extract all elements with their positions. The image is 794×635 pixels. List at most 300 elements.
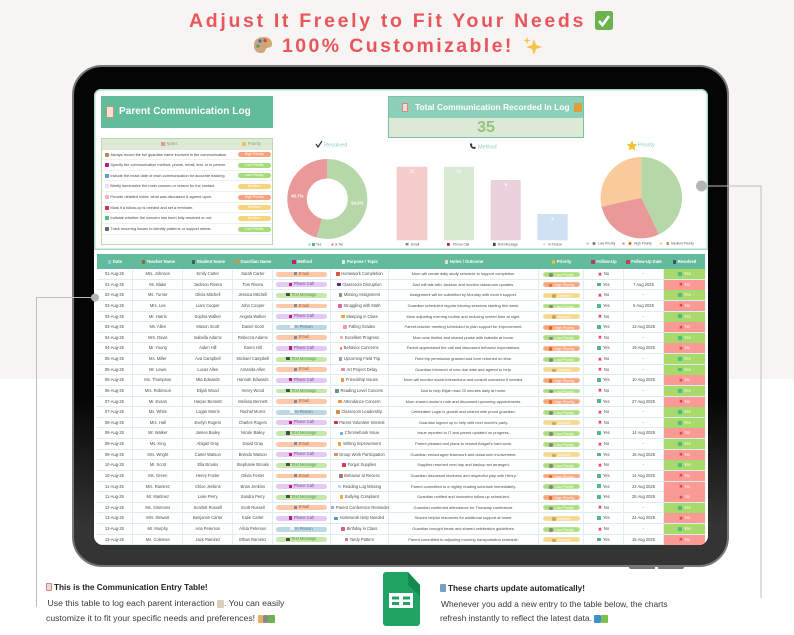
- row 24: Mrs. Stewart: [146, 515, 169, 520]
- row 23: ✖: [598, 505, 602, 511]
- row 12: ✖: [598, 388, 602, 394]
- row 10: 05-Aug-25: [105, 367, 124, 372]
- row 8: 04-Aug-25: [105, 345, 124, 350]
- donut legend: ×: [335, 242, 338, 247]
- row 25: 13-Aug-25: [105, 526, 124, 531]
- note 6: Mark if a follow-up is needed and set a reminder.: [110, 206, 193, 210]
- callout line: table: [36, 294, 99, 607]
- row 20: ✖: [679, 473, 683, 479]
- row 19: ✖: [598, 463, 602, 469]
- row 25: Yes: [684, 526, 691, 531]
- row 20: High Priority: [554, 475, 574, 479]
- row 4: Mrs. Lee: [150, 303, 166, 308]
- note 7: Indicate whether the concern has been fully resolved or not.: [110, 216, 212, 220]
- row 20: Behavior at Recess: [344, 473, 380, 478]
- row 13: Yes: [603, 398, 610, 404]
- row 1: Sarah Carter: [241, 271, 265, 276]
- row 5: Phone Call: [294, 313, 314, 318]
- row 23: Email: [299, 504, 309, 509]
- row 9: ✖: [598, 357, 602, 363]
- row 3: -: [643, 292, 644, 297]
- row 15: Parent Volunteer Interest: [339, 420, 385, 425]
- row 13: ✖: [679, 399, 683, 405]
- table header: Resolved: [678, 259, 696, 264]
- row 4: 6 Aug 2025: [633, 303, 654, 308]
- row 4: Email: [299, 303, 309, 308]
- row 17: Parent pleased and plans to reward Abigail's hard work.: [415, 441, 512, 446]
- row 9: Ava Campbell: [195, 356, 220, 361]
- row 11: High Priority: [554, 379, 574, 383]
- row 1: Mrs. Johnson: [146, 271, 170, 276]
- row 26: Yes: [603, 537, 610, 542]
- row 19: Mr. Scott: [150, 462, 166, 467]
- row 25: Aria Peterson: [195, 526, 220, 531]
- row 19: Forgot Supplies: [348, 462, 376, 467]
- charts note heading: These charts update automatically!: [448, 584, 585, 593]
- pie legend: High Priority: [634, 242, 652, 246]
- row 12: Yes: [684, 388, 691, 393]
- note 2: Low Priority: [245, 163, 263, 167]
- row 5: Mom adjusting evening routine and reducing screen time at night.: [406, 314, 520, 318]
- row 9: No: [604, 356, 609, 361]
- notes table header: Priority: [248, 141, 261, 146]
- note 8: Low Priority: [245, 227, 263, 231]
- row 13: Attendance Concern: [343, 398, 381, 404]
- note 2: Specify the communication method: phone, email, text, or in person.: [110, 163, 226, 167]
- note 5: Provide detailed notes: what was discussed & agreed upon.: [110, 195, 212, 199]
- row 18: Phone Call: [294, 451, 314, 456]
- total value: 35: [477, 118, 495, 136]
- note 1: [102, 150, 272, 160]
- row 17: ✖: [598, 442, 602, 448]
- row 17: Writing Improvement: [343, 441, 381, 446]
- row 16: No: [685, 430, 690, 435]
- row 14: -: [643, 409, 644, 414]
- row 3: 02-Aug-25: [105, 292, 124, 297]
- row 10: Guardian informed of new due date and agreed to help.: [415, 367, 512, 372]
- row 13: Melissa Bennett: [238, 398, 267, 404]
- row 23: Guardian confirmed attendance for Thursday conference.: [414, 505, 513, 510]
- row 8: Phone Call: [294, 345, 314, 350]
- row 4: Liam Cooper: [196, 303, 220, 308]
- row 7: [96, 333, 705, 343]
- upper background band: [0, 0, 794, 379]
- row 18: 09-Aug-25: [105, 452, 124, 457]
- text block: charts note: [440, 584, 668, 623]
- row 26: ✖: [679, 537, 683, 543]
- row 2: ✖: [679, 282, 683, 288]
- row 14: Logan Morris: [196, 409, 220, 414]
- row 21: Reading Log Missing: [343, 484, 381, 488]
- row 19: Yes: [684, 462, 691, 467]
- row 8: No: [685, 345, 690, 350]
- row 1: Yes: [684, 271, 691, 276]
- donut legend: [308, 242, 343, 247]
- row 19: 10-Aug-25: [105, 462, 124, 467]
- row 8: Aiden Hill: [199, 345, 216, 350]
- row 22: No: [685, 494, 690, 499]
- method title: Method: [478, 145, 497, 151]
- row 8: Parent appreciated the call and discussed behavior expectations.: [407, 345, 520, 350]
- heading line 2: 100% Customizable!: [282, 35, 514, 57]
- row 23: Low Priority: [555, 506, 574, 510]
- row 15: ✖: [598, 420, 602, 426]
- row 13: 07-Aug-25: [105, 398, 124, 404]
- row 11: Yes: [603, 377, 610, 382]
- row 3: Ms. Turner: [148, 292, 168, 297]
- row 8: Yes: [603, 345, 610, 350]
- row 5: -: [643, 314, 644, 318]
- row 23: Yes: [684, 505, 691, 510]
- bar values: [410, 168, 554, 221]
- heading line 1: Adjust It Freely to Fit Your Needs: [189, 10, 586, 32]
- row 2: No: [685, 282, 690, 287]
- pie chart: priority: [586, 140, 694, 246]
- row 21: Low Priority: [555, 485, 574, 489]
- row 5: Angela Walker: [240, 314, 266, 318]
- row 20: [96, 471, 705, 482]
- tablet frame: [72, 65, 729, 567]
- row 20: 10-Aug-25: [105, 473, 124, 478]
- row 1: No: [604, 271, 609, 276]
- row 23: Parent Conference Reminder: [336, 505, 389, 510]
- row 6: Ms. Allen: [149, 324, 166, 329]
- row 25: In Person: [295, 526, 313, 531]
- row 19: No: [604, 462, 609, 467]
- row 6: [96, 322, 705, 333]
- row 19: Text Message: [291, 462, 317, 467]
- row 16: Nicole Bailey: [241, 430, 265, 435]
- row 20: 14 Aug 2025: [632, 473, 655, 478]
- row 16: 08-Aug-25: [105, 430, 124, 435]
- row 10: Email: [299, 366, 309, 371]
- row 10: Art Project Delay: [347, 367, 377, 372]
- row 2: Jackson Rivera: [194, 282, 222, 287]
- row 20: Yes: [603, 473, 610, 478]
- table header: Student Name: [197, 259, 225, 264]
- row 11: [96, 375, 705, 386]
- row 7: Low Priority: [555, 336, 574, 340]
- row 26: 13-Aug-25: [105, 537, 124, 542]
- row 2: Classroom Disruption: [342, 282, 382, 287]
- row 24: Homework Help Needed: [340, 515, 384, 520]
- row 3: Olivia Mitchell: [195, 292, 220, 297]
- row 26: Medium: [558, 538, 571, 542]
- row 6: Mason Scott: [196, 324, 219, 329]
- row 4: No: [685, 303, 690, 308]
- row 14: Classroom Leadership: [341, 409, 382, 414]
- row 9: Upcoming Field Trip: [344, 356, 380, 361]
- row 3: [96, 290, 705, 301]
- bar values: 11: [410, 168, 415, 174]
- dashboard panel: [94, 89, 708, 250]
- row 14: Celebrated Logan's growth and shared with proud guardian.: [411, 409, 516, 414]
- row 11: Mom will monitor social interactions and consult counselor if needed.: [404, 377, 523, 382]
- row 5: ✖: [598, 314, 602, 320]
- note 5: [102, 192, 272, 203]
- row 26: Jack Ramirez: [195, 537, 220, 542]
- row 10: ✖: [598, 367, 602, 373]
- bar chart: method: [396, 143, 568, 247]
- row 16: Chromebook Issue: [345, 430, 379, 435]
- pie legend: Low Priority: [598, 242, 616, 246]
- row 24: ✖: [679, 516, 683, 522]
- row 25: Alicia Peterson: [239, 526, 266, 531]
- row 15: Guardian signed up to help with next month's party.: [419, 420, 508, 425]
- row 25: No: [604, 526, 609, 531]
- row 21: [96, 482, 705, 492]
- text block: entry table note: [46, 583, 284, 623]
- row 18: ✖: [679, 452, 683, 458]
- entry table line 1: Use this table to log each parent interaction . You can easily: [48, 598, 284, 608]
- row 2: 01-Aug-25: [105, 282, 124, 287]
- row 13: Mom shared doctor's note and discussed upcoming appointments.: [406, 398, 521, 404]
- row 2: [96, 280, 705, 290]
- row 10: [96, 365, 705, 375]
- notes and priority table: [101, 138, 273, 245]
- row 12: No: [604, 388, 609, 393]
- row 1: Emily Carter: [197, 271, 219, 276]
- row 1: [96, 269, 705, 280]
- row 19: Stephanie Brooks: [237, 462, 269, 467]
- row 5: Medium: [558, 315, 571, 319]
- row 5: No: [604, 314, 609, 318]
- callout line: charts: [696, 180, 762, 598]
- row 17: -: [643, 441, 644, 446]
- row 6: 03-Aug-25: [105, 324, 124, 329]
- tablet screen: [94, 89, 708, 545]
- row 3: Medium: [558, 294, 571, 298]
- row 1: -: [643, 271, 644, 276]
- row 18: Brenda Watson: [239, 452, 267, 457]
- row 16: ✖: [679, 431, 683, 437]
- row 18: Medium: [558, 453, 571, 457]
- row 5: Yes: [684, 314, 691, 318]
- note 6: [102, 203, 272, 213]
- row 6: Yes: [603, 324, 610, 329]
- row 11: Mia Edwards: [196, 377, 220, 382]
- row 3: Text Message: [291, 292, 317, 297]
- table header: Method: [297, 259, 312, 264]
- row 16: Yes: [603, 430, 610, 435]
- row 16: Mr. Walker: [148, 430, 168, 435]
- row 13: Email: [299, 398, 309, 403]
- row 17: David Gray: [243, 441, 263, 446]
- row 14: Ms. White: [149, 409, 167, 414]
- note 2: [102, 160, 272, 171]
- row 22: Text Message: [291, 494, 317, 499]
- row 8: 19 Aug 2025: [632, 345, 655, 350]
- dashboard title: Parent Communication Log: [119, 106, 251, 117]
- row 1: Low Priority: [555, 273, 574, 277]
- row 20: Guardian discussed kindness and respectful play with Henry.: [410, 473, 517, 478]
- row 22: Sandra Perry: [241, 494, 265, 499]
- row 6: ✖: [679, 325, 683, 331]
- row 16: 14 Aug 2025: [632, 430, 655, 435]
- table header: Date: [113, 259, 122, 264]
- row 18: No: [685, 452, 690, 457]
- dashboard title: [101, 96, 273, 128]
- row 10: Lucas Allen: [197, 367, 218, 372]
- row 7: Isabella Adams: [194, 335, 222, 340]
- row 14: 07-Aug-25: [105, 409, 124, 414]
- bar labels: In Person: [548, 243, 562, 247]
- row 7: 04-Aug-25: [105, 335, 124, 340]
- row 23: No: [604, 505, 609, 510]
- row 22: 25 Aug 2025: [632, 494, 655, 499]
- method title: [470, 143, 497, 151]
- row 2: Yes: [603, 282, 610, 287]
- row 7: Rebecca Adams: [238, 335, 268, 340]
- row 15: [96, 418, 705, 428]
- row 25: [96, 524, 705, 535]
- row 19: Supplies returned next day and backup set arranged.: [417, 462, 510, 467]
- row 4: Low Priority: [555, 305, 574, 309]
- donut slices: 45.7%: [291, 193, 304, 198]
- row 12: 06-Aug-25: [105, 388, 124, 393]
- row 21: Phone Call: [294, 483, 314, 488]
- pie legend: [586, 242, 694, 246]
- row 22: High Priority: [554, 496, 574, 500]
- row 21: Parent committed to a nightly reading schedule immediately.: [411, 484, 516, 488]
- row 8: High Priority: [554, 347, 574, 351]
- pie legend: Medium Priority: [671, 242, 694, 246]
- row 4: Guardian scheduled regular tutoring sessions starting this week.: [408, 303, 519, 308]
- row 6: Falling Grades: [349, 324, 375, 329]
- note 4: Briefly summarize the main concern or reason for the contact.: [110, 184, 215, 188]
- row 1: 01-Aug-25: [105, 271, 124, 276]
- row 22: Yes: [603, 494, 610, 499]
- row 7: -: [643, 335, 644, 340]
- row 25: Birthday in Class: [347, 526, 377, 531]
- row 19: Ella Brooks: [197, 462, 218, 467]
- row 4: John Cooper: [241, 303, 265, 308]
- row 8: Karen Hill: [244, 345, 262, 350]
- row 18: Group Work Participation: [339, 452, 385, 457]
- pie slices: [601, 157, 682, 238]
- row 9: -: [643, 356, 644, 361]
- row 16: Issue reported to IT and parent updated on progress.: [417, 430, 510, 435]
- row 13: No: [685, 398, 690, 404]
- entry table heading: This is the Communication Entry Table!: [54, 583, 208, 592]
- row 4: Struggling with Math: [343, 303, 380, 308]
- row 19: Low Priority: [555, 464, 574, 468]
- row 13: High Priority: [554, 400, 574, 404]
- note 3: [102, 171, 272, 181]
- note 7: [102, 213, 272, 224]
- row 15: 08-Aug-25: [105, 420, 124, 425]
- row 15: Mrs. Hall: [150, 420, 166, 425]
- donut legend: Yes: [316, 243, 322, 247]
- note 4: Medium: [248, 184, 260, 188]
- row 3: Assignment will be submitted by Monday with mom's support.: [410, 292, 517, 297]
- row 13: [96, 396, 705, 407]
- row 17: Low Priority: [555, 443, 574, 447]
- row 9: 05-Aug-25: [105, 356, 124, 361]
- row 11: Phone Call: [294, 377, 314, 382]
- row 3: No: [604, 292, 609, 297]
- row 13: 27 Aug 2025: [632, 398, 655, 404]
- row 12: Mrs. Robinson: [145, 388, 171, 393]
- row 9: Text Message: [291, 356, 317, 361]
- row 11: Friendship Issues: [346, 377, 378, 382]
- note 6: Medium: [248, 205, 260, 209]
- row 9: Yes: [684, 356, 691, 361]
- row 14: Low Priority: [555, 411, 574, 415]
- row 22: Mr. Martinez: [147, 494, 169, 499]
- row 9: Low Priority: [555, 358, 574, 362]
- row 15: No: [604, 420, 609, 425]
- row 3: ✖: [598, 293, 602, 299]
- row 2: 7 Aug 2025: [633, 282, 654, 287]
- row 21: Brian Jenkins: [240, 484, 265, 488]
- row 14: No: [604, 409, 609, 414]
- row 15: Evelyn Rogers: [194, 420, 221, 425]
- bar labels: Phone Call: [453, 243, 469, 247]
- row 18: Mrs. Wright: [147, 452, 168, 457]
- bar values: 4: [551, 216, 554, 221]
- row 5: Sleeping in Class: [346, 314, 378, 318]
- method bars: [397, 167, 568, 240]
- row 12: -: [643, 388, 644, 393]
- row 7: Yes: [684, 335, 691, 340]
- note 1: High Priority: [245, 152, 264, 156]
- row 18: [96, 450, 705, 460]
- row 21: Yes: [603, 484, 610, 488]
- row 17: Email: [299, 441, 309, 446]
- row 21: 11-Aug-25: [105, 484, 124, 488]
- row 24: Shared helpful resources for additional support at home.: [414, 515, 513, 520]
- row 4: [96, 301, 705, 312]
- row 11: ✖: [679, 378, 683, 384]
- row 22: 11-Aug-25: [105, 494, 124, 499]
- row 10: No: [604, 367, 609, 372]
- row 16: James Bailey: [196, 430, 220, 435]
- row 22: Luke Perry: [198, 494, 218, 499]
- note 8: [102, 224, 272, 235]
- row 15: -: [643, 420, 644, 425]
- table header: Purpose / Topic: [347, 259, 378, 264]
- row 25: ✖: [598, 527, 602, 533]
- row 26: Ethan Ramirez: [239, 537, 266, 542]
- row 24: Katie Carter: [242, 515, 264, 520]
- row 25: Mr. Murphy: [148, 526, 168, 531]
- row 9: Field trip permission granted and form returned on time.: [415, 356, 512, 361]
- row 16: Low Priority: [555, 432, 574, 436]
- row 6: Parent-teacher meeting scheduled to plan support for improvement.: [404, 324, 522, 329]
- row 24: Phone Call: [294, 515, 314, 520]
- bar values: 9: [504, 182, 507, 187]
- row 22: [96, 492, 705, 503]
- total communication card: [388, 96, 584, 138]
- table header: Guardian Name: [240, 259, 271, 264]
- row 14: [96, 407, 705, 418]
- note 5: High Priority: [245, 195, 264, 199]
- row 15: Phone Call: [294, 419, 314, 424]
- row 3: Missing Assignment: [344, 292, 380, 297]
- table header: Follow-Up: [596, 259, 617, 264]
- row 10: Amanda Allen: [240, 367, 265, 372]
- row 14: Rachel Morris: [240, 409, 265, 414]
- row 15: Medium: [558, 421, 571, 425]
- row 24: Medium: [558, 517, 571, 521]
- row 21: Mrs. Ramirez: [146, 484, 170, 488]
- row 8: ✖: [679, 346, 683, 352]
- row 21: No: [685, 484, 690, 488]
- table header: Notes / Outcome: [450, 259, 483, 264]
- row 12: Reading Level Concern: [341, 388, 383, 393]
- row 15: Yes: [684, 420, 691, 425]
